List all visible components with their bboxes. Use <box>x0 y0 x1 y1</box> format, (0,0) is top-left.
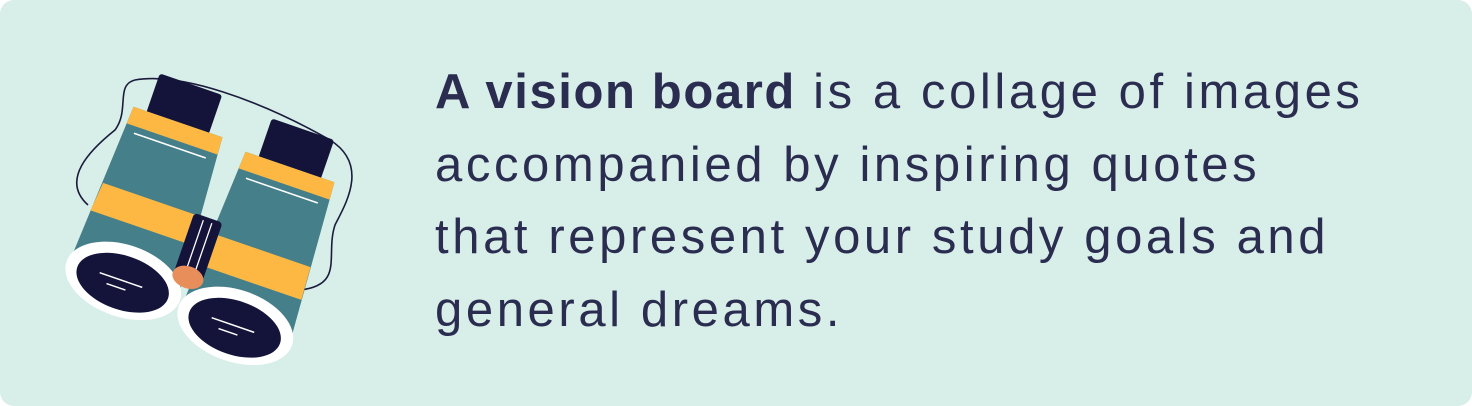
bridge <box>169 213 224 293</box>
text block: definition: A vision board is a collage of images <box>435 65 1364 119</box>
text block: definition <box>435 65 1364 336</box>
icon: binoculars <box>65 74 353 366</box>
text block: definition: general dreams. <box>435 282 843 336</box>
text block: definition: accompanied by inspiring quotes <box>435 138 1260 192</box>
strap <box>77 79 352 290</box>
text block: definition: that represent your study goals and <box>435 210 1329 264</box>
left barrel <box>55 65 248 334</box>
right barrel <box>167 110 360 379</box>
